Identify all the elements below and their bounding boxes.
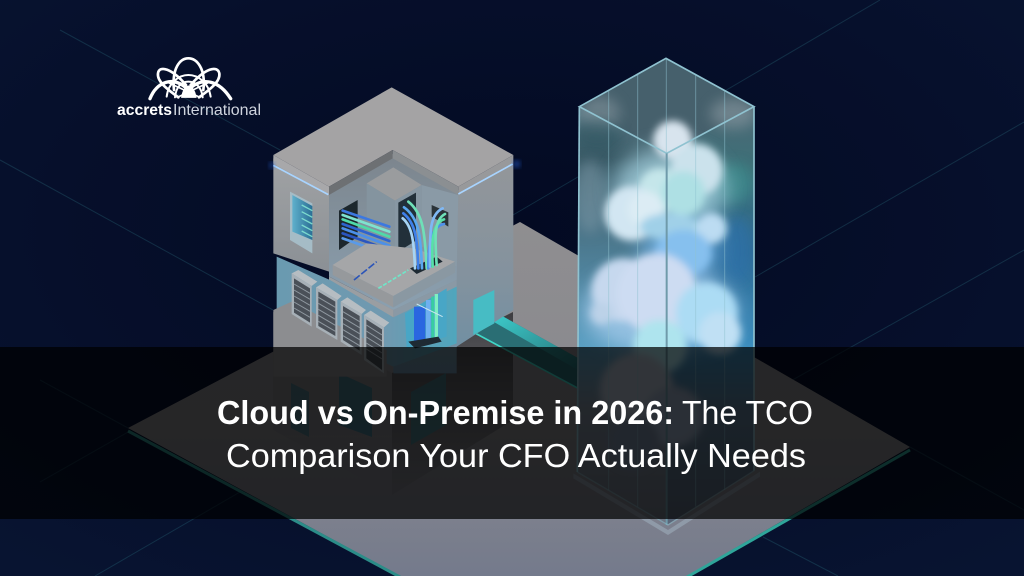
logo emblem: [150, 58, 231, 99]
platform glowing edge left: [128, 431, 400, 576]
lower recess: [277, 257, 457, 367]
lower ledge: [273, 302, 387, 377]
server rack 2: [316, 283, 342, 340]
glass left face: [577, 107, 667, 525]
left-wall window: [290, 192, 312, 253]
right wall: [393, 163, 513, 373]
glass edge lines: [577, 58, 754, 525]
teal floor track: [473, 312, 585, 392]
tower base plate: [573, 472, 760, 535]
logo: accrets International: International: [173, 102, 261, 119]
platform glowing edge right: [687, 450, 910, 576]
server rack 4: [364, 311, 389, 373]
horizontal cable bundle: [343, 211, 389, 255]
small dark port: [432, 205, 448, 227]
logo wordmark: accrets: [117, 102, 172, 119]
logo: accrets International: [117, 58, 261, 119]
building reflection on floor: [273, 312, 513, 495]
glass right face: [667, 107, 754, 525]
blue light strip right: [458, 164, 513, 194]
blue light strip left: [273, 165, 328, 195]
title line 1: Cloud vs On-Premise in 2026:: [217, 394, 674, 431]
glass tower with cloud: [573, 58, 760, 535]
title banner: [0, 347, 1024, 519]
floor dashes: [354, 262, 377, 280]
cloud glow: [583, 147, 737, 353]
left wall: [273, 158, 329, 272]
title text: [217, 394, 813, 474]
roof: [269, 87, 520, 195]
right-wall window: [473, 290, 494, 335]
white cloud: [590, 121, 741, 470]
hazy inner clouds: [573, 97, 757, 283]
server rack 3: [341, 297, 366, 355]
platform: [128, 222, 910, 576]
balcony slab: [329, 243, 457, 317]
vertical cable riser: [405, 288, 447, 348]
dark cable opening left: [339, 200, 358, 250]
glass top face: [579, 58, 754, 153]
title line 1: The TCO: [682, 394, 813, 431]
inner cube: [367, 167, 458, 267]
Y-shaped cable bundle: [403, 202, 445, 268]
server rack 1: [292, 270, 317, 327]
building: on-premise data centre: [269, 87, 520, 377]
recessed bay: [329, 154, 458, 310]
title line 2: Comparison Your CFO Actually Needs: [226, 437, 806, 474]
server racks: [292, 270, 389, 373]
